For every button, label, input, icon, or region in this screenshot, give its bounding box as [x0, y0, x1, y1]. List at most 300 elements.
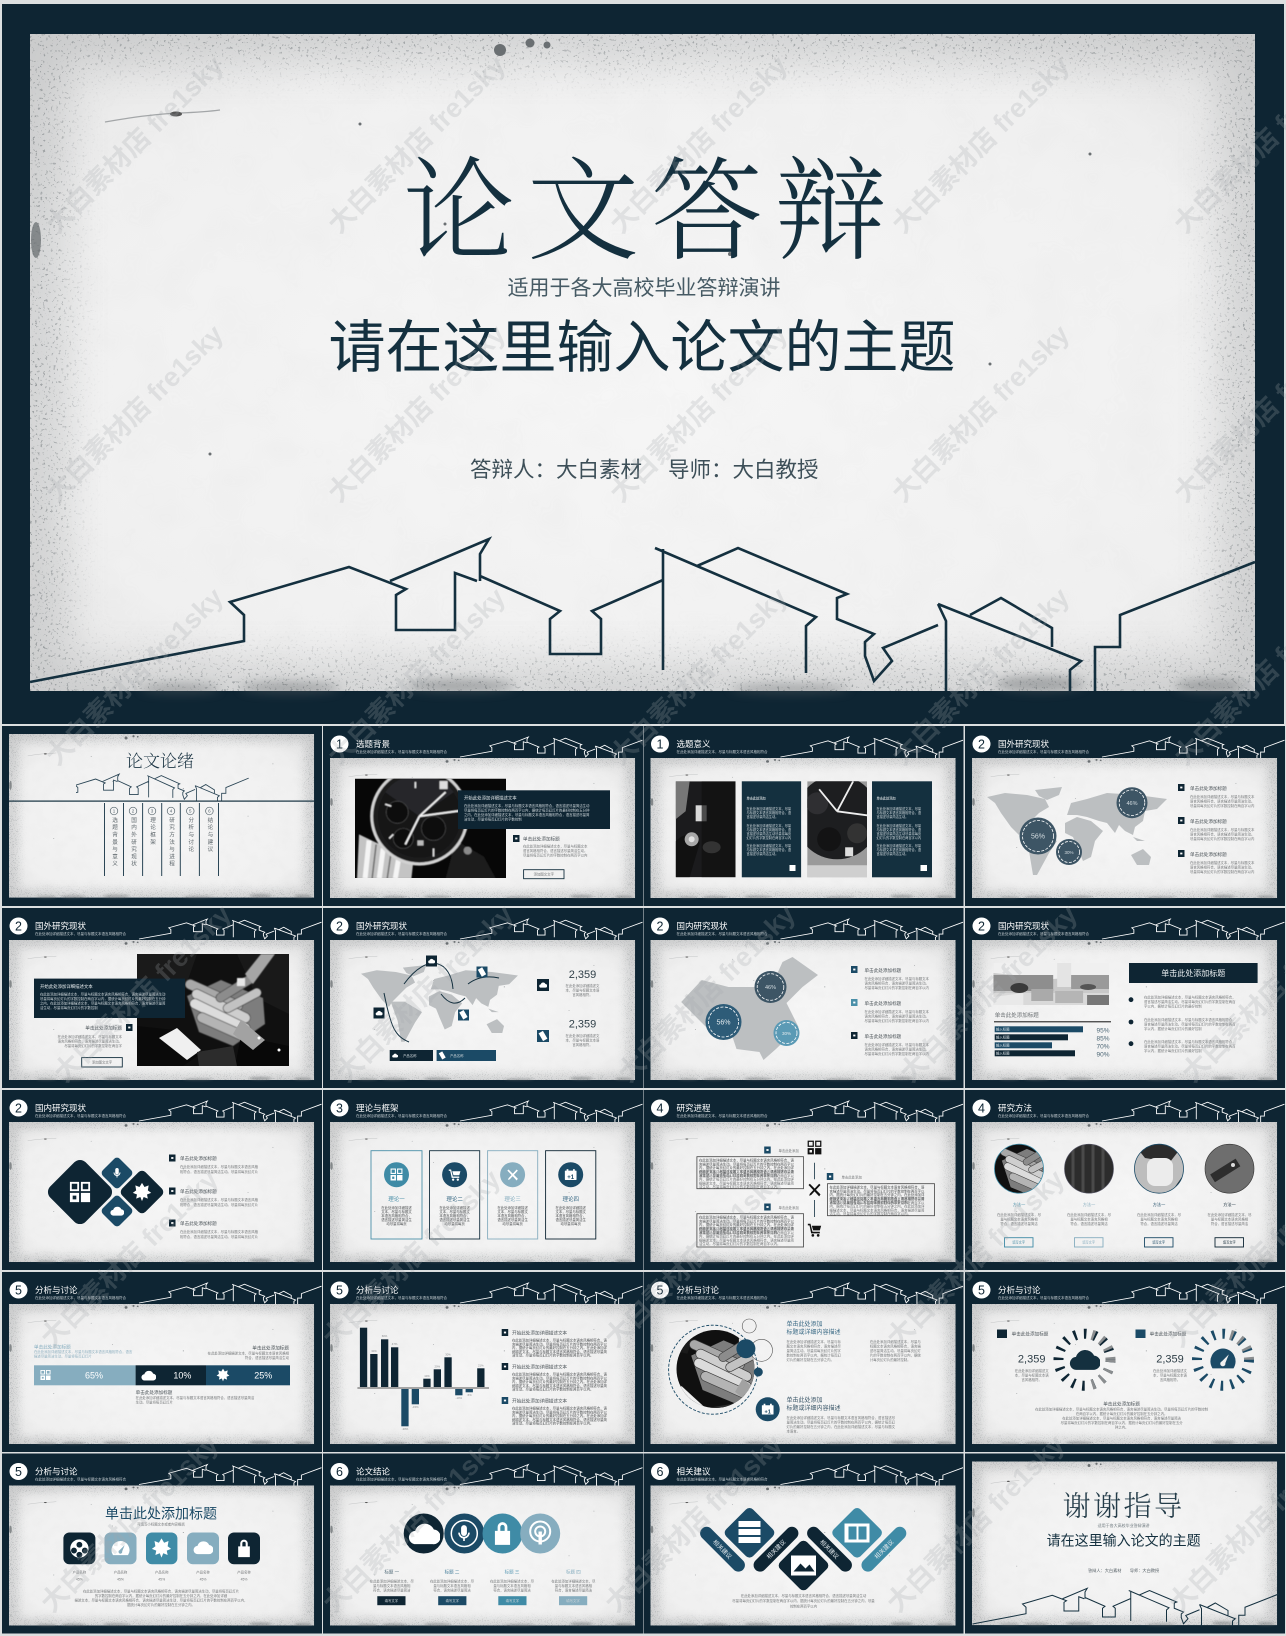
stat left — [997, 1330, 1049, 1382]
panel: recommendations — [644, 1454, 964, 1634]
text overlay: 开始此处添加详细描述文本 — [464, 794, 517, 802]
watermark layer: 大白素材店 fre1sky — [35, 1164, 224, 1353]
text card: 与标题文本语言风格相符合，语 — [876, 827, 922, 832]
bubble 30% — [774, 1020, 800, 1046]
stat 1: 在此处添加详细描述文 — [566, 983, 600, 988]
card 4: +1 — [567, 1175, 575, 1181]
upper copy: 数控制在两百字以内，据统计每页幻 — [786, 1352, 841, 1358]
summary text: 的字数控制在两百字以内，据统计每页幻灯片的最好控制在五分钟之内，在此处添加详细 — [95, 1593, 228, 1598]
panel: overseas status map: 在此处添加详细描述文本，尽量与标题文本语言风格相符合 — [998, 749, 1089, 754]
text card — [742, 781, 801, 877]
note below — [136, 1389, 255, 1404]
note below: 单击此处添加标题 — [136, 1389, 173, 1396]
lower copy: 标题或详细内容描述 — [786, 1404, 841, 1412]
bar chart: 60% — [382, 1334, 388, 1338]
column 2: 量与标题文本语言风格相 — [433, 1583, 471, 1588]
watermark layer: 大白素材店 fre1sky — [894, 899, 1083, 1088]
stat 1: 言风格相符。 — [572, 992, 593, 997]
text overlay: 开始此处添加详细描述文本 — [40, 983, 93, 990]
button — [524, 870, 564, 879]
stat right — [1136, 1330, 1188, 1382]
divider line — [9, 800, 314, 802]
panel: analysis bar chart — [323, 1272, 643, 1452]
chapter numbers: 3 — [151, 809, 154, 814]
column 1: 填写文字 — [385, 1598, 399, 1603]
panel: analysis bar chart: 5 — [336, 1284, 343, 1298]
bar chart: 20% — [434, 1364, 441, 1368]
dashed ring and accent circles — [669, 1319, 772, 1414]
panel: topic significance: 选题意义 — [676, 739, 711, 749]
text overlay: 尽量将每页幻灯片的字数控制在两百字以内，据统计每页幻灯片的最好控制在五分钟 — [40, 996, 166, 1001]
photo: watch detail — [676, 781, 736, 877]
icon circles — [404, 1514, 560, 1554]
panel: overseas status flows: 在此处添加详细描述文本，尽量与标题文本语言风格相符合 — [356, 931, 447, 936]
progress bars — [995, 1026, 1110, 1058]
method 1: 符合，语言描述尽量简洁 — [1000, 1221, 1038, 1226]
watermark layer: 大白素材店 fre1sky — [886, 50, 1075, 239]
note right: 符合，语言描述尽量简洁生动 — [245, 1355, 290, 1360]
panel: domestic status map: 在此处添加详细描述文本，尽量与标题文本语言风格相符合 — [676, 931, 768, 936]
panel: research process: 4 — [657, 1102, 664, 1116]
bullets: 字以内，据统计每页幻灯片的最好控制 — [1144, 1048, 1202, 1053]
column 2: 标题 二 — [445, 1568, 460, 1576]
panel: overseas status flows: 国外研究现状 — [356, 921, 408, 931]
panel: analysis percent bar — [2, 1272, 322, 1452]
list items: 相符合，语言描述尽量简洁生动。尽量将每页幻灯片 — [180, 1234, 259, 1239]
numbered vertical chapter list: 结论与建议 — [206, 816, 213, 854]
summary text: 描述文本，尽量与标题文本语言风格相符合，语言描述尽量简洁生动，尽量将每页幻灯片的字数控制在两百字以内， — [75, 1598, 247, 1602]
panel: research methods: 在此处添加详细描述文本，尽量与标题文本语言风格相符合 — [998, 1113, 1089, 1118]
list items: 在此处添加详细描述文本，尽量与标题文本语言风格 — [180, 1164, 259, 1169]
panel: recommendations: 在此处添加详细描述文本，尽量与标题文本语言风格相符合 — [676, 1476, 768, 1482]
numbered vertical chapter list — [111, 816, 213, 868]
panel: research process — [644, 1090, 964, 1270]
panel: theory framework: 在此处添加详细描述文本，尽量与标题文本语言风格相符合 — [356, 1113, 447, 1118]
column 3: 在此处添加详细描述文本，尽 — [490, 1578, 535, 1584]
panel: domestic status map: 2 — [657, 920, 664, 934]
method 1: 填写文字 — [1012, 1240, 1025, 1245]
summary text: 单击此处添加标题 — [1103, 1400, 1140, 1408]
watermark layer: 大白素材店 fre1sky — [322, 582, 511, 771]
column 1: 符合，语言描述尽量简洁 — [373, 1588, 411, 1592]
panel: domestic status bars: 国内研究现状 — [998, 921, 1050, 931]
subtitle: 适用于各大高校毕业答辩演讲 — [1098, 1522, 1150, 1528]
method 1: 量与标题文本语言风格相 — [1000, 1216, 1038, 1222]
bullets — [1129, 994, 1236, 1053]
summary text: 在此处添加详细描述文本，尽量与标题文本语言风格相符合，语言描述尽量简洁生动 — [741, 1593, 867, 1598]
method 3: 符合，语言描述尽量简洁 — [1140, 1221, 1178, 1226]
stacked percentage bar: 65% — [85, 1370, 103, 1380]
panel: domestic status diamonds: 国内研究现状 — [35, 1103, 87, 1113]
panel: analysis icon row: 在此处添加详细描述文本，尽量与标题文本语言风格相符合 — [35, 1476, 126, 1482]
panel: domestic status map — [644, 908, 964, 1088]
panel: research methods: 研究方法 — [998, 1103, 1032, 1113]
tile labels: 45% — [200, 1578, 206, 1582]
column 4 — [551, 1568, 596, 1605]
column 3 — [490, 1568, 535, 1605]
text overlay: 尽量将每页幻灯片的字数控制在两百字以内，据统计每页幻灯片的最好控制在五分钟 — [464, 808, 590, 812]
numbered vertical chapter list: 选题背景与意义 — [111, 816, 118, 868]
text card — [872, 781, 932, 877]
card 2: 动尽量将每页 — [444, 1221, 465, 1226]
title: 论文答辩 — [403, 151, 899, 275]
panel: domestic status bars: 2 — [978, 920, 985, 934]
hands photo — [137, 954, 289, 1066]
watch photo — [355, 767, 506, 879]
card 1 — [371, 1151, 422, 1239]
panel: conclusion: 论文结论 — [356, 1466, 391, 1476]
panel: topic significance — [644, 726, 964, 906]
summary text: 钟之内。 — [1115, 1424, 1128, 1430]
text card: 言描述尽量简洁生动尽量将每页 — [876, 831, 921, 836]
method 2: 填写文字 — [1082, 1240, 1095, 1245]
stat right: 2,359 — [1156, 1354, 1184, 1366]
chart notes: 开始此处添加详细描述文本 — [512, 1398, 568, 1404]
watermark layer: 大白素材店 fre1sky — [886, 319, 1075, 508]
China map — [681, 957, 818, 1060]
list item: 单击此处添加标题 — [85, 1024, 122, 1032]
card 1: 文本，尽量与标题文 — [381, 1209, 412, 1214]
watermark layer: 大白素材店 fre1sky — [599, 1164, 788, 1353]
column 2: 填写文字 — [446, 1598, 460, 1603]
panel: topic background: 1 — [336, 738, 343, 752]
column 3: 标题 三 — [505, 1568, 520, 1576]
list item: 语言风格相符合，语言描述尽量简洁生动。 — [58, 1039, 122, 1044]
bar chart: 30% — [445, 1352, 451, 1356]
progress bars: 85% — [1096, 1035, 1110, 1042]
method 1 — [994, 1144, 1044, 1248]
card 2 — [430, 1151, 480, 1239]
recommendation pills: 相关建议 — [765, 1538, 787, 1561]
legend bars — [390, 1050, 496, 1061]
bar chart — [357, 1328, 489, 1431]
watermark layer: 大白素材店 fre1sky — [604, 50, 793, 239]
list item — [58, 1024, 132, 1048]
card 4: 语言描述尽量简洁生 — [555, 1217, 587, 1222]
thesis topic: 请在这里输入论文的主题 — [328, 316, 956, 380]
panel: thank-you slide — [965, 1454, 1285, 1634]
chapter numbers: 5 — [189, 809, 192, 814]
watermark layer: 大白素材店 fre1sky — [48, 899, 237, 1088]
panel: topic background — [323, 726, 643, 906]
panel: main cover slide — [2, 4, 1284, 724]
text card: 与标题文本语言风格相符合，语 — [876, 847, 922, 852]
card 4: 动尽量将每页 — [561, 1221, 581, 1226]
text overlay: 洁生动，尽量将每页幻灯片的字数控制 — [464, 816, 522, 822]
text box bottom left — [697, 1214, 804, 1247]
upper copy: 计每页幻灯片的最好控制。 — [870, 1357, 911, 1362]
summary text: 在此处添加详细描述文本，尽量与标题文本语言风格相符合，语言描述尽量简洁 — [1062, 1416, 1182, 1420]
stat 1: 本，尽量与标题文本语 — [566, 988, 600, 992]
panel: overseas status photo: 2 — [15, 920, 22, 934]
stacked percentage bar — [34, 1365, 290, 1385]
card 4: 本语言风格相符合， — [555, 1213, 586, 1218]
tile labels — [73, 1570, 251, 1582]
panel: analysis radial stats — [965, 1272, 1285, 1452]
summary text: 在两百字以内，据统计每页幻灯片的最好控制在五分钟之内。 — [1076, 1411, 1167, 1416]
column 4: 符合，语言描述尽量简洁 — [555, 1588, 593, 1592]
note left: 单击此处添加标题 — [34, 1344, 71, 1350]
bar chart: 47% — [392, 1342, 398, 1346]
method 2: 方法一 — [1083, 1201, 1095, 1208]
bubble 30%: 30% — [782, 1031, 791, 1036]
stat 2: 2,359 — [569, 1018, 596, 1030]
watermark layer: 大白素材店 fre1sky — [604, 582, 793, 771]
tile labels: 45% — [76, 1578, 83, 1582]
method 1: 在此处添加详细描述文本，尽 — [997, 1212, 1042, 1217]
panel: overseas status flows — [323, 908, 643, 1088]
card 3: 语言描述尽量简洁生 — [497, 1217, 528, 1222]
column 1: 在此处添加详细描述文本，尽 — [370, 1578, 414, 1584]
card 3: 本语言风格相符合， — [497, 1213, 528, 1218]
bullets: 语言描述尽量简洁生动。尽量将每页幻灯片的字数控制在两百 — [1144, 1022, 1236, 1026]
card 1: 本语言风格相符合， — [381, 1213, 412, 1218]
chapter numbers: 1 — [113, 809, 116, 814]
lower copy: 灯片的最好控制在五分钟之内，在此处添加详细描述文本，尽量与标题文 — [786, 1424, 896, 1429]
thanks heading: 谢谢指导 — [1063, 1490, 1185, 1522]
list item — [513, 835, 588, 858]
panel: domestic status bars: 在此处添加详细描述文本，尽量与标题文本语言风格相符合 — [998, 931, 1089, 936]
column 2: 符合，语言描述尽量简洁 — [433, 1588, 471, 1592]
title box: 单击此处添加标题 — [1161, 968, 1225, 978]
bullets: 在此处添加详细描述文本，尽量与标题文本语言风格相符合， — [1144, 1017, 1236, 1022]
card 2: 理论二 — [446, 1195, 463, 1203]
lower copy: 单击此处添加 — [786, 1396, 823, 1404]
progress bars: 输入标题 — [996, 1026, 1010, 1032]
step labels: 单击此处添加 — [778, 1205, 799, 1210]
summary text: 据统计每页幻灯片的最好控制在五分钟之内。 — [127, 1602, 195, 1607]
panel: analysis circle photo: 分析与讨论 — [676, 1285, 720, 1295]
watermark layer: 大白素材店 fre1sky — [881, 1164, 1070, 1353]
stat left: 言风格相符。 — [1022, 1377, 1042, 1382]
list items: 单击此处添加标题 — [180, 1188, 217, 1195]
text card: 在此处添加详细描述文本，尽量 — [746, 823, 792, 828]
bar chart: -38% — [402, 1427, 409, 1431]
paper background — [30, 34, 1255, 694]
method 4: 填写文字 — [1223, 1240, 1236, 1245]
panel: analysis radial stats: 在此处添加详细描述文本，尽量与标题文本语言风格相符合 — [998, 1295, 1089, 1300]
card 3: 在此处添加详细描述 — [497, 1205, 528, 1210]
method 1: 方法一 — [1013, 1201, 1025, 1208]
panel: recommendations: 相关建议 — [676, 1466, 711, 1476]
bullets: 在此处添加详细描述文本，尽量与标题文本语言风格相符合， — [1144, 1039, 1236, 1044]
panel: contents slide — [2, 726, 322, 906]
panel: analysis circle photo — [644, 1272, 964, 1452]
card 4 — [546, 1151, 596, 1239]
progress bars: 输入标题 — [996, 1042, 1010, 1048]
list items: 相符合，语言描述尽量简洁生动。尽量将每页幻灯片 — [180, 1202, 259, 1207]
panel: analysis bar chart: 分析与讨论 — [356, 1285, 399, 1295]
list item: 单击此处添加标题 — [523, 836, 560, 842]
lower copy: 在此处添加详细描述文本，尽量与标题文本语言风格相符合，语言描述尽 — [786, 1415, 896, 1420]
bullets: 语言描述尽量简洁生动。尽量将每页幻灯片的字数控制在两百 — [1144, 999, 1236, 1004]
card 4: 文本，尽量与标题文 — [555, 1209, 587, 1214]
presenter line: 答辩人：大白素材 导师：大白教授 — [1088, 1567, 1160, 1574]
note right — [208, 1344, 290, 1360]
icon: battery plus: +1 — [765, 1410, 771, 1416]
diamonds with icons — [723, 1506, 884, 1592]
column 3: 符合，语言描述尽量简洁 — [493, 1588, 531, 1592]
watermark layer: 大白素材店 fre1sky — [322, 319, 511, 508]
presenter line: 导师：大白教授 — [668, 458, 819, 482]
summary text: 在此处添加详细描述文本，尽量与标题文本语言风格相符合，语言描述尽量简洁生动，尽量将每页幻灯片 — [83, 1588, 240, 1594]
card 3: 动尽量将每页 — [502, 1221, 523, 1226]
list items: 单击此处添加标题 — [1190, 785, 1227, 792]
list items: 在此处添加详细描述文本，尽量与标题文本语言风格 — [180, 1197, 259, 1202]
watermark layer: 大白素材店 fre1sky — [317, 1429, 506, 1618]
tile labels: 45% — [241, 1578, 247, 1582]
upper copy: 在此处添加详细描述文本，尽量与标 — [786, 1339, 841, 1344]
list items — [851, 966, 930, 1056]
tile labels: 45% — [158, 1578, 165, 1582]
column 3: 填写文字 — [506, 1598, 520, 1603]
recommendation pills: 相关建议 — [711, 1538, 734, 1561]
method 2: 符合，语言描述尽量简洁 — [1070, 1221, 1108, 1226]
button: 添加图文文字 — [534, 872, 555, 876]
list items: 相符合，语言描述尽量简洁生动。尽量将每页幻灯片 — [180, 1169, 259, 1174]
upper copy: 单击此处添加 — [786, 1320, 823, 1328]
stat left: 本，尽量与标题文本语 — [1015, 1372, 1049, 1378]
panel: analysis percent bar: 分析与讨论 — [35, 1285, 78, 1295]
list items: 在此处添加详细描述文本，尽量与标题文本语言风格 — [180, 1229, 259, 1234]
bullets: 语言描述尽量简洁生动。尽量将每页幻灯片的字数控制在两百 — [1144, 1044, 1236, 1048]
column 1: 量与标题文本语言风格相 — [373, 1583, 411, 1588]
panel: overseas status map: 2 — [978, 738, 985, 752]
panel: analysis radial stats: 分析与讨论 — [998, 1285, 1041, 1295]
text card: 言描述尽量简洁生动。 — [746, 814, 778, 819]
chart heading: 单击此处添加标题 — [995, 1011, 1039, 1019]
list items: 单击此处添加标题 — [1190, 818, 1227, 825]
upper copy: 述尽量简洁生动。尽量将每页幻灯 — [870, 1348, 921, 1353]
button — [82, 1058, 122, 1067]
text overlay: 之内。在此处添加详细描述文本，尽量与标题文本语言风格相符合，语言描述尽量简 — [40, 1000, 166, 1006]
column 4: 在此处添加详细描述文本，尽 — [551, 1578, 596, 1584]
bubble 46%: 46% — [765, 985, 776, 991]
panel: analysis radial stats: 5 — [978, 1284, 985, 1298]
note below: 生动。尽量将每页幻灯片 — [136, 1400, 174, 1404]
tile labels: 产品名称 — [196, 1570, 210, 1574]
numbered vertical chapter list: 理论框架 — [149, 817, 156, 846]
stat left: 在此处添加详细描述文 — [1015, 1368, 1049, 1373]
list items: 单击此处添加标题 — [864, 1000, 902, 1007]
list items: 单击此处添加标题 — [864, 1033, 902, 1040]
world map — [987, 787, 1167, 875]
stat 1: 2,359 — [569, 969, 596, 981]
panel: domestic status map: 国内研究现状 — [676, 921, 728, 931]
bubble 46% — [754, 971, 786, 1003]
panel: topic significance: 1 — [657, 738, 664, 752]
skyline outline — [30, 539, 1255, 691]
bar chart: 30% — [371, 1349, 377, 1353]
panel: analysis percent bar: 5 — [15, 1284, 22, 1298]
slide heading: 可填写小标题文本或者内容概括 — [137, 1522, 185, 1526]
card 2: 语言描述尽量简洁生 — [439, 1217, 470, 1222]
panel: theory framework: 理论与框架 — [356, 1103, 399, 1113]
thesis topic: 请在这里输入论文的主题 — [1047, 1532, 1201, 1548]
tile labels: 45% — [117, 1578, 124, 1582]
text card: 与标题文本语言风格相符合，语 — [746, 810, 792, 815]
recommendation pills — [697, 1524, 909, 1574]
card 1: 动尽量将每页 — [386, 1221, 407, 1226]
stacked percentage bar: 25% — [254, 1370, 272, 1380]
column 4: 量与标题文本语言风格相 — [555, 1583, 593, 1588]
panel: analysis icon row — [2, 1454, 322, 1634]
card 2: 在此处添加详细描述 — [439, 1205, 470, 1210]
numbered vertical chapter list: 研究方法与进程 — [168, 817, 175, 868]
method 3: 填写文字 — [1152, 1240, 1165, 1245]
progress bars: 95% — [1096, 1027, 1110, 1034]
method 3: 方法一 — [1153, 1201, 1165, 1208]
method 2: 量与标题文本语言风格相 — [1070, 1216, 1108, 1222]
list items — [1178, 784, 1255, 874]
stat left: 单击此处添加标题 — [1012, 1330, 1049, 1338]
note right: 单击此处添加标题 — [252, 1344, 289, 1352]
circular hands photo — [676, 1330, 754, 1408]
panel: research process: 研究进程 — [676, 1103, 711, 1113]
text card: 言描述尽量简洁生动。 — [876, 851, 908, 856]
bullets: 在此处添加详细描述文本，尽量与标题文本语言风格相符合， — [1144, 994, 1236, 1000]
text overlay: 在此处添加详细描述文本，尽量与标题文本语言风格相符合，语言描述尽量简洁生动 — [464, 803, 590, 808]
bar chart: 21% — [478, 1364, 484, 1368]
watermark layer: 大白素材店 fre1sky — [886, 582, 1075, 771]
bubble 46% — [1116, 787, 1148, 818]
progress bars: 90% — [1096, 1051, 1110, 1058]
text overlay — [34, 979, 185, 1018]
stacked percentage bar: 10% — [173, 1370, 191, 1380]
radial icon: cloud — [1058, 1334, 1110, 1386]
stat 2: 本，尽量与标题文本语 — [566, 1038, 600, 1042]
heading: 论文论绪 — [126, 752, 194, 771]
stat right: 单击此处添加标题 — [1150, 1330, 1187, 1338]
summary text: 尽量将每页幻灯片的字数控制在两百字以内，据统计每页幻灯片的最好控制在五分钟之内，尽量 — [732, 1598, 875, 1603]
text card: 在此处添加详细描述文本，尽量 — [876, 823, 922, 828]
chart notes: 开始此处添加详细描述文本 — [512, 1330, 568, 1336]
text card: 与标题文本语言风格相符合，语 — [746, 827, 792, 832]
step labels: 单击此处添加 — [778, 1148, 799, 1153]
watermark layer: 大白素材店 fre1sky — [330, 899, 519, 1088]
panel: analysis circle photo: 在此处添加详细描述文本，尽量与标题文本语言风格相符合 — [676, 1295, 768, 1300]
heading rule — [994, 1021, 1111, 1022]
panel: analysis icon row: 分析与讨论 — [35, 1466, 78, 1476]
world map — [361, 965, 518, 1042]
column 1 — [370, 1568, 414, 1605]
upper copy: 标题文本语言风格相符合，语言描 — [870, 1344, 921, 1348]
list items — [169, 1154, 259, 1239]
watermark layer: 大白素材店 fre1sky — [881, 1429, 1070, 1618]
chart notes: 开始此处添加详细描述文本 — [512, 1364, 568, 1370]
column 2: 在此处添加详细描述文本，尽 — [430, 1578, 475, 1584]
list item: 在此处添加详细描述文本，尽量与标题文本 — [58, 1034, 123, 1039]
recommendation pills: 相关建议 — [873, 1538, 895, 1561]
method 4: 量与标题文本语言风格相 — [1211, 1216, 1249, 1222]
process icons and connectors — [808, 1141, 821, 1237]
legend bars: 产品名称 — [450, 1053, 464, 1058]
method 3 — [1134, 1144, 1184, 1247]
office photo — [993, 963, 1109, 1005]
text overlay — [458, 790, 610, 829]
stat right: 在此处添加详细描述文 — [1153, 1368, 1188, 1373]
tile labels: 产品名称 — [114, 1570, 128, 1574]
subtitle: 适用于各大高校毕业答辩演讲 — [508, 277, 780, 300]
upper copy: 在此处添加详细描述文本，尽量与 — [870, 1339, 921, 1344]
bullets: 字以内，据统计每页幻灯片的最好控制 — [1144, 1004, 1202, 1008]
method 2: 在此处添加详细描述文本，尽 — [1067, 1212, 1112, 1217]
summary text — [1035, 1400, 1209, 1430]
chapter numbers: 4 — [170, 809, 173, 814]
bar chart: -15% — [412, 1405, 419, 1409]
method 4: 在此处添加详细描述文本，尽 — [1207, 1212, 1252, 1217]
bubble 56% — [1020, 818, 1056, 854]
